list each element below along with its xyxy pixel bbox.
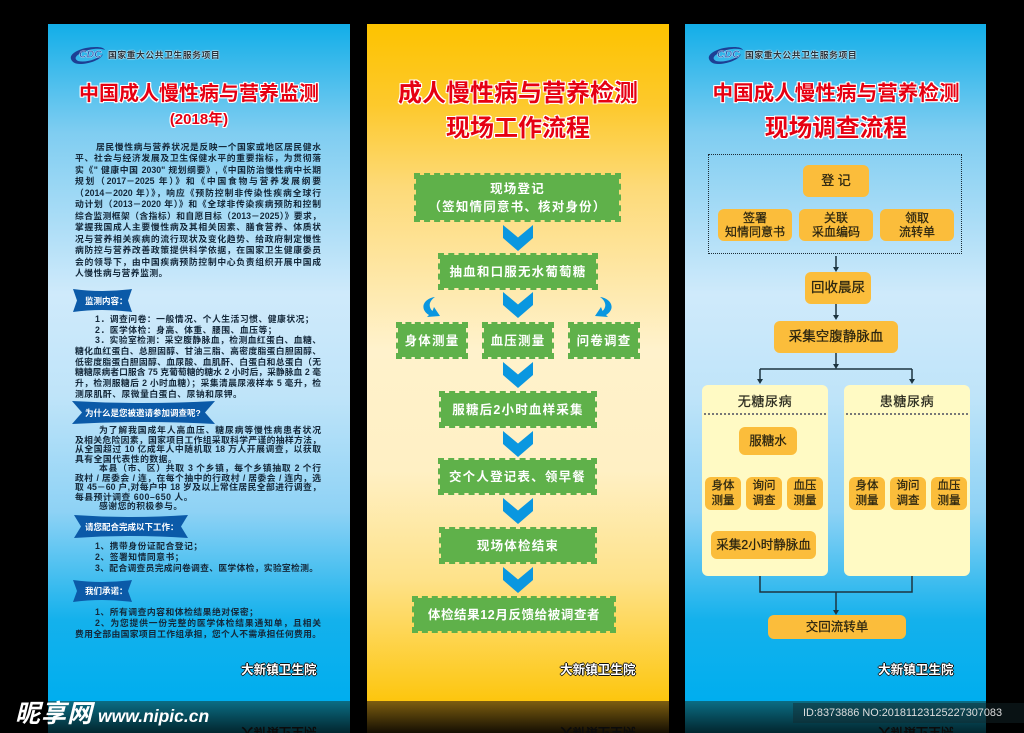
step: collect morning urine <box>805 272 871 304</box>
ribbon heading: monitoring content: 监测内容： <box>85 296 128 306</box>
text block: monitoring content <box>75 314 321 399</box>
text block: introduction: 平、社会与经济发展及卫生保健水平的重要指标，为贯彻落 <box>75 153 321 163</box>
subtitle: year: (2018年) <box>170 111 228 128</box>
step: return flow sheet <box>768 615 906 639</box>
text block: introduction: 掌握我国成人主要慢性病及其相关因素、膳食营养、体质状 <box>75 222 321 232</box>
step: return flow sheet: 交回流转单 <box>806 620 868 634</box>
step: inquiry: 询问 <box>752 480 776 492</box>
heading: 无糖尿病 <box>738 394 792 409</box>
icon: CDC logo <box>708 47 743 64</box>
heading: 患糖尿病 <box>880 394 934 409</box>
text block: introduction: 居民慢性病与营养状况是反映一个国家或地区居民健水 <box>96 142 321 152</box>
text block: introduction: 动计划（2013－2020 年）》和《全球非传染疾病预防和控制 <box>75 199 321 209</box>
ribbon heading: our promise: 我们承诺： <box>85 586 128 596</box>
arrow <box>503 431 533 457</box>
text block: monitoring content: 低密度脂蛋白胆固醇、血尿酸、血肌酐、白蛋白和总蛋白（无 <box>75 357 321 367</box>
text block: monitoring content: 糖化血红蛋白、总胆固醇、甘油三脂、高密度脂蛋白胆固醇、 <box>75 346 321 356</box>
step: link blood code: 采血编码 <box>812 225 860 239</box>
text block: why invited: 从全国超过 10 亿成年人中随机取 18 万人开展调查，以获取 <box>75 444 321 454</box>
step: inquiry: 询问 <box>896 480 920 492</box>
step: inquiry <box>746 477 782 510</box>
text block: monitoring content: 3．实验室检测：采空腹静脉血，检测血红蛋白、血糖、 <box>95 335 321 345</box>
text block: why invited: 感谢您的积极参与。 <box>99 501 183 511</box>
step: blood pressure <box>931 477 967 510</box>
icon: curved arrow left <box>423 297 440 317</box>
step: blood draw: 抽血和口服无水葡萄糖 <box>449 264 586 278</box>
text block: why invited: 政村 / 居委会 / 连，在每个抽中的行政村 / 居委会 / 连内，选 <box>75 472 321 482</box>
reflection: panel 2 <box>367 701 669 733</box>
connectors <box>757 256 915 615</box>
step: informed consent: 知情同意书 <box>725 225 785 239</box>
step: exam finished: 现场体检结束 <box>477 538 559 552</box>
text block: why invited: 为了解我国成年人高血压、糖尿病等慢性病患者状况 <box>99 425 321 435</box>
text block: introduction <box>75 142 321 278</box>
subtitle: 现场调查流程 <box>765 116 907 142</box>
ribbon heading: please cooperate <box>74 515 188 538</box>
text block: introduction: 实《" 健康中国 2030" 规划纲要》,《中国防治慢性病中长期 <box>75 164 321 174</box>
step: link blood code: 关联 <box>824 211 848 225</box>
step: blood draw <box>438 253 598 290</box>
title: 成人慢性病与营养检测 <box>398 80 638 107</box>
text block: please cooperate <box>95 540 318 572</box>
step: body measurement <box>849 477 885 510</box>
step: registration <box>803 165 869 197</box>
text block: introduction: 规划（2017－2025 年）》和《中国食物与营养发展纲要 <box>75 176 321 186</box>
step: body measurement: 身体 <box>712 480 734 492</box>
step: 2-hour blood: 采集2小时静脉血 <box>716 538 811 552</box>
hospital name: 大新镇卫生院 <box>878 663 954 677</box>
text block: why invited: 取 45－60 户,对每户中 18 岁及以上常住居民全部进行调查， <box>75 482 321 492</box>
text block: monitoring content: 糖糖尿病者口服含 75 克葡萄糖的糖水 2 小时后，采静脉血 2 毫 <box>75 367 321 377</box>
header: project name: 国家重大公共卫生服务项目 <box>108 50 220 60</box>
text block: why invited: 每县预计调查 600–650 人。 <box>75 492 193 502</box>
step: blood pressure: 测量 <box>794 494 816 506</box>
arrow <box>503 567 533 593</box>
step: 2-hour blood <box>711 531 816 559</box>
step: collect morning urine: 回收晨尿 <box>811 280 865 295</box>
step: blood pressure: 血压测量 <box>491 334 545 348</box>
step: inquiry: 调查 <box>752 494 776 506</box>
step: link blood code <box>799 209 873 241</box>
hospital name: 大新镇卫生院 <box>241 663 317 677</box>
step: inquiry: 调查 <box>896 494 920 506</box>
text block: introduction: 人慢性病与营养监测。 <box>75 268 168 278</box>
step: questionnaire <box>568 322 640 359</box>
watermark: site name: 昵享网 www.nipic.cn <box>15 700 209 728</box>
panel: field workflow (yellow) <box>367 24 669 701</box>
icon: CDC logo: CDC <box>79 48 102 60</box>
text block: why invited: 具有全国代表性的数据。 <box>75 454 177 464</box>
text block: introduction: 会的领导下，由中国疾病预防控制中心负责组织开展中国成 <box>75 256 321 266</box>
text block: monitoring content: 测尿肌酐、尿微量白蛋白、尿钠和尿钾。 <box>75 389 242 399</box>
step: fasting blood: 采集空腹静脉血 <box>789 329 883 344</box>
text block: our promise: 1、所有调查内容和体检结果绝对保密； <box>95 606 258 616</box>
step: body measurement: 身体 <box>856 480 878 492</box>
icon: CDC logo <box>70 47 105 64</box>
step: questionnaire: 问卷调查 <box>577 334 631 348</box>
text block: why invited: 本县（市、区）共取 3 个乡镇，每个乡镇抽取 2 个行 <box>99 463 321 473</box>
text block: introduction: 况与营养相关疾病的流行现状及变化趋势、给政府制定慢性 <box>75 234 321 244</box>
text block: our promise: 2、为您提供一份完整的医学体检结果通知单，且相关 <box>95 618 321 628</box>
text block: introduction: 病防控与营养改善政策提供科学依据，在国家卫生健康委员 <box>75 245 321 255</box>
step: body measurement: 测量 <box>712 494 734 506</box>
card: no diabetes <box>702 385 828 576</box>
icon: curved arrow right <box>595 297 612 317</box>
panel: survey flowchart (blue) <box>685 24 986 701</box>
step: 2-hour blood sample <box>439 391 597 428</box>
step: informed consent: 签署 <box>743 211 767 225</box>
step: registration: 登 记 <box>821 173 851 188</box>
step: hand in form <box>438 458 597 495</box>
text block: please cooperate: 1、携带身份证配合登记； <box>95 540 203 550</box>
ribbon heading: our promise <box>73 580 132 602</box>
panel: survey introduction (blue) <box>48 24 350 701</box>
text block: why invited <box>75 425 321 511</box>
step: body measurement: 测量 <box>856 494 878 506</box>
step: registration: （签知情同意书、核对身份） <box>428 200 607 214</box>
ribbon heading: why invited: 为什么是您被邀请参加调查呢? <box>85 408 201 418</box>
step: registration <box>414 173 621 222</box>
title: 中国成人慢性病与营养监测 <box>79 83 319 105</box>
card: diabetes <box>844 385 970 576</box>
reflection: panel 3 <box>685 701 986 733</box>
step: inquiry <box>890 477 926 510</box>
step: get flow sheet <box>880 209 954 241</box>
step: exam finished <box>439 527 597 564</box>
reflection: panel 1 <box>48 701 350 733</box>
step: 2-hour blood sample: 服糖后2小时血样采集 <box>452 402 584 416</box>
step: blood pressure <box>482 322 554 359</box>
text block: please cooperate: 3、配合调查员完成问卷调查、医学体检，实验室检测。 <box>95 562 318 572</box>
text block: please cooperate: 2、签署知情同意书； <box>95 552 184 562</box>
step: hand in form: 交个人登记表、领早餐 <box>449 470 586 484</box>
subtitle: 现场工作流程 <box>446 115 590 142</box>
step: registration: 现场登记 <box>490 182 545 196</box>
ribbon heading: monitoring content <box>73 289 132 312</box>
step: blood pressure: 血压 <box>938 480 960 492</box>
step: results feedback: 体检结果12月反馈给被调查者 <box>428 608 600 622</box>
group: registration steps <box>708 154 962 254</box>
watermark: image id: ID:8373886 NO:20181123125227307083 <box>803 707 1002 719</box>
text block: our promise <box>75 606 321 638</box>
step: blood pressure <box>787 477 823 510</box>
text block: introduction: （2014－2020 年）》，响应《预防控制非传染性疾病全球行 <box>75 188 321 198</box>
watermark: image id <box>793 703 1024 723</box>
text block: monitoring content: 2．医学体检：身高、体重、腰围、血压等； <box>95 325 277 335</box>
step: get flow sheet: 流转单 <box>899 225 935 239</box>
arrow <box>503 292 533 318</box>
ribbon heading: please cooperate: 请您配合完成以下工作： <box>85 522 179 532</box>
arrow <box>503 225 533 251</box>
step: results feedback <box>412 596 616 633</box>
step: blood pressure: 测量 <box>938 494 960 506</box>
arrow <box>503 498 533 524</box>
step: get flow sheet: 领取 <box>905 211 929 225</box>
text block: why invited: 及相关危险因素，国家项目工作组采取科学严谨的抽样方法， <box>75 434 321 444</box>
title: 中国成人慢性病与营养检测 <box>712 82 960 105</box>
text block: our promise: 费用全部由国家项目工作组承担，您个人不需承担任何费用。 <box>75 628 321 638</box>
ribbon heading: why invited <box>72 401 215 424</box>
text block: introduction: 综合监测框架（含指标）和自愿目标（2013－2025）》要求， <box>75 210 321 220</box>
hospital name: 大新镇卫生院 <box>560 663 636 677</box>
step: informed consent <box>718 209 792 241</box>
text block: monitoring content: 1．调查问卷：一般情况、个人生活习惯、健康状况； <box>95 314 314 324</box>
arrow <box>503 362 533 388</box>
step: body measurement: 身体测量 <box>405 334 459 348</box>
text block: monitoring content: 升，检测服糖后 2 小时血糖）；采集清晨尿液样本 5 毫升，检 <box>75 378 321 388</box>
step: fasting blood <box>774 321 898 353</box>
icon: CDC logo: CDC <box>717 48 740 60</box>
step: body measurement <box>705 477 741 510</box>
step: body measurement <box>396 322 468 359</box>
step: glucose water <box>739 427 797 455</box>
step: blood pressure: 血压 <box>794 480 816 492</box>
step: glucose water: 服糖水 <box>749 434 787 448</box>
header: project name: 国家重大公共卫生服务项目 <box>745 50 857 60</box>
